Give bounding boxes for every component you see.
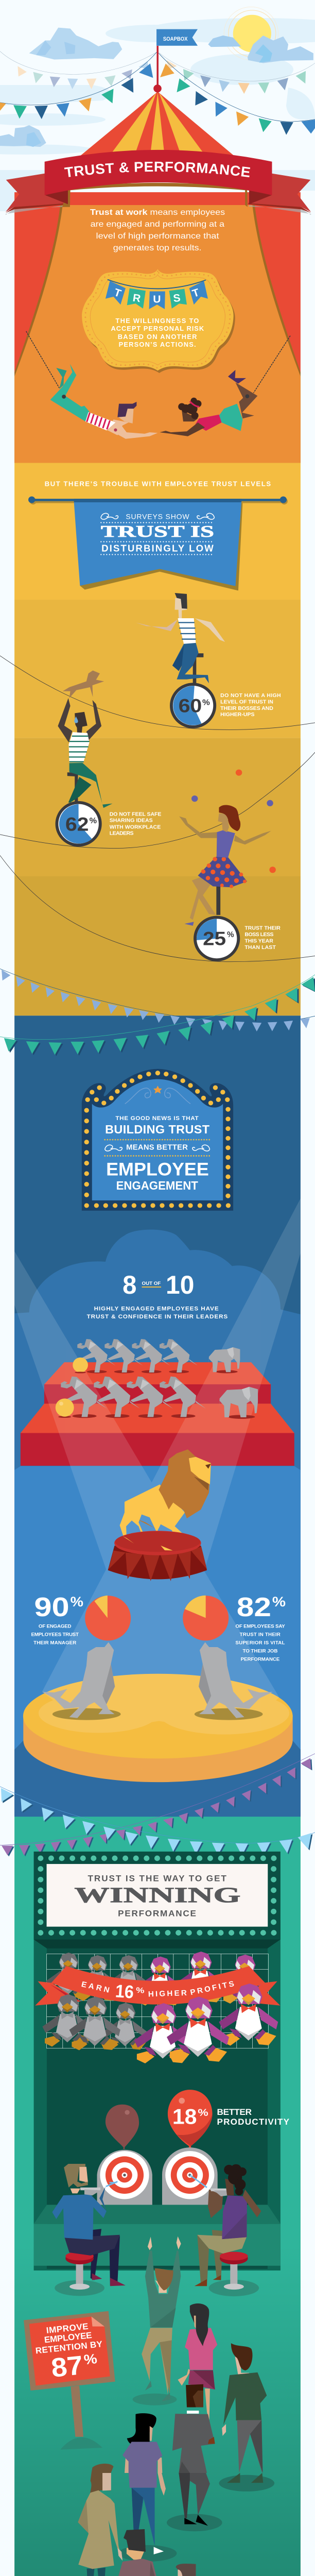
man in green jacket [222, 2343, 267, 2473]
text: 25 percent: THIS YEAR [244, 939, 273, 944]
woman in trench coat [78, 2473, 122, 2576]
retention sign: EMPLOYEE [44, 2330, 92, 2345]
unicycle wheel: 25 percent: % [227, 930, 234, 939]
trapeze artist woman [160, 370, 257, 436]
booth counter [34, 2205, 281, 2266]
player: right [190, 2164, 261, 2296]
scene in zoom coordinates [0, 7, 315, 463]
text: 62 percent: WITH WORKPLACE [110, 824, 161, 830]
TRUST pennants: U [153, 294, 161, 305]
prize banner [35, 1966, 280, 2006]
retention sign: 87 [50, 2350, 84, 2383]
prize banner: EARN [80, 1980, 110, 1995]
blue bunting [0, 969, 315, 1031]
retention sign: % [83, 2351, 98, 2367]
intro text [90, 208, 225, 252]
subheading: trouble: BUT THERE’S TROUBLE WITH EMPLOYEE TRUST LEVELS [45, 480, 271, 488]
trust definition text [111, 317, 204, 348]
heading: 8 out of 10: 10 [166, 1270, 194, 1299]
stat: 82 percent: TRUST IN THEIR [240, 1632, 281, 1638]
stat: 90 percent [31, 1592, 83, 1646]
text: better productivity: BETTER [217, 2107, 252, 2117]
marquee sign: good news: EMPLOYEE [106, 1159, 209, 1179]
lower darker floor [14, 1741, 301, 1817]
red curtain panel [14, 192, 301, 374]
balloon: dim [106, 2105, 139, 2149]
green bunting [0, 975, 315, 1056]
unicycle wheel: 25 percent: 25 [203, 928, 226, 950]
stat: 82 percent: % [272, 1594, 286, 1609]
text: 25 percent [244, 926, 281, 951]
front bunting [0, 52, 315, 135]
sky: pale cloud bands [0, 18, 315, 211]
unicyclist: juggler [179, 769, 276, 926]
unicyclist: 62 percent with dog [57, 670, 113, 845]
stat: 82 percent: 82 [237, 1592, 271, 1622]
unicyclist: 60 percent: % [202, 698, 210, 707]
game booth back [34, 1920, 281, 2270]
gray penguins back [46, 1953, 150, 2001]
red steps [21, 1362, 294, 1466]
booth marquee [34, 1852, 281, 1940]
seal: right with ball [183, 1596, 273, 1720]
retention sign [24, 2311, 115, 2450]
balloon: 18 percent [168, 2090, 213, 2148]
trust plaque [82, 269, 235, 373]
text: 62 percent: LEADERS [110, 831, 134, 836]
TRUST pennants: T [113, 286, 122, 300]
text: 60 percent [220, 693, 281, 718]
seal: left with ball [42, 1596, 131, 1720]
orange stage backdrop [14, 205, 301, 463]
floor shadows [68, 2475, 276, 2576]
marquee sign: good news: THE GOOD NEWS IS THAT [115, 1115, 199, 1122]
cheering person [133, 2236, 181, 2405]
intro text: are engaged and performing at a [91, 219, 225, 229]
TRUST pennants: S [172, 292, 181, 304]
man in gray suit [172, 2384, 215, 2473]
unicyclist: 62 percent with dog: % [90, 817, 97, 825]
woman in pink [178, 2303, 217, 2420]
booth marquee: WINNING [74, 1884, 241, 1907]
man in mauve shirt [105, 2529, 169, 2576]
heading: 8 out of 10 [122, 1270, 194, 1299]
TRUST pennants: T [191, 286, 201, 300]
text: highly engaged employees: TRUST & CONFIDENCE IN THEIR LEADERS [87, 1314, 227, 1320]
sky blue bunting [0, 1787, 315, 1857]
text: 25 percent: THAN LAST [244, 945, 276, 951]
hanging banner: TRUST IS [101, 522, 214, 540]
woman in purple shirt [122, 2413, 162, 2473]
text: 60 percent: LEVEL OF TRUST IN [220, 699, 273, 705]
gray penguins front [42, 1994, 147, 2050]
legs of the men [179, 2473, 263, 2526]
heading: 8 out of 10: 8 [122, 1270, 136, 1299]
trapeze chains [26, 331, 290, 393]
TRUST pennants: R [132, 292, 142, 304]
trust definition text: BASED ON ANOTHER [118, 333, 197, 341]
booth marquee: PERFORMANCE [118, 1909, 196, 1918]
unicyclist: 62 percent with dog: 62 [65, 814, 89, 835]
unicyclist: 60 percent [135, 593, 225, 727]
stat: 90 percent: % [71, 1594, 83, 1609]
flag pole and flag [156, 29, 198, 87]
player: left [52, 2164, 126, 2296]
balloon: 18 percent: 18 [172, 2105, 197, 2128]
stat: 82 percent: PERFORMANCE [241, 1657, 280, 1662]
text: 60 percent: DO NOT HAVE A HIGH [220, 693, 281, 699]
circus tent top [80, 84, 234, 156]
circus drum [108, 1531, 207, 1581]
pale back bunting [0, 51, 315, 94]
text: 25 percent: TRUST THEIR [244, 926, 281, 931]
balloon: 18 percent: % [198, 2108, 208, 2119]
prize banner: PROFITS [189, 1979, 235, 1997]
stat: 90 percent: OF ENGAGED [39, 1624, 72, 1630]
elephants row [73, 1339, 240, 1374]
orange stage fill [14, 205, 301, 463]
booth marquee: TRUST IS THE WAY TO GET [88, 1874, 226, 1884]
green section background [14, 1817, 301, 2576]
hanging banner [28, 497, 288, 590]
yellow ring platform [23, 1674, 293, 1782]
marquee sign: good news: ENGAGEMENT [116, 1179, 198, 1192]
cloud: right of sun [208, 36, 313, 63]
stat: 90 percent: EMPLOYEES TRUST [31, 1632, 79, 1638]
target: left [97, 2150, 152, 2205]
text: highly engaged employees [87, 1306, 227, 1320]
intro text: Trust at work means employees [90, 208, 225, 217]
cloud: upper left [29, 28, 122, 60]
cloud: lower left [0, 125, 46, 147]
yellow section backgrounds [14, 463, 301, 1015]
stat: 90 percent: 90 [34, 1592, 69, 1622]
sun [224, 7, 278, 60]
trapeze artist man [50, 364, 157, 439]
marquee sign: good news: MEANS BETTER [126, 1144, 188, 1152]
stat: 82 percent [235, 1592, 286, 1662]
stage floor [14, 1466, 301, 1750]
intro text: level of high performance that [96, 231, 219, 241]
prize banner: 16 [115, 1981, 134, 2003]
stat: 82 percent: SUPERIOR IS VITAL [235, 1640, 285, 1646]
tightropes [0, 656, 315, 962]
prize banner: % [136, 1986, 145, 1995]
curly haired woman head [92, 2464, 114, 2473]
stat: 82 percent: TO THEIR JOB [242, 1648, 277, 1654]
text: 25 percent: BOSS LESS [244, 932, 274, 938]
trust definition text: PERSON’S ACTIONS. [119, 341, 196, 348]
title ribbon [5, 149, 311, 215]
trust definition text: ACCEPT PERSONAL RISK [111, 325, 204, 332]
stat: 82 percent: OF EMPLOYEES SAY [235, 1624, 285, 1630]
prize banner: HIGHER [148, 1989, 187, 1998]
text: better productivity [217, 2107, 290, 2127]
text: 62 percent [110, 811, 161, 836]
heading: 8 out of 10: OUT OF [142, 1281, 161, 1286]
retention sign: RETENTION BY [35, 2339, 103, 2355]
purple penguins back [136, 1952, 268, 2006]
purple bunting [0, 1754, 315, 1856]
purple penguins front [134, 1984, 278, 2063]
father [155, 2564, 214, 2576]
text: highly engaged employees: HIGHLY ENGAGED EMPLOYEES HAVE [94, 1306, 219, 1312]
text: 60 percent: HIGHER-UPS [220, 712, 255, 718]
marquee sign: good news [82, 1069, 233, 1211]
intro text: generates top results. [113, 243, 201, 252]
text: 60 percent: THEIR BOSSES AND [220, 706, 273, 711]
trust definition text: THE WILLINGNESS TO [115, 317, 199, 325]
spotlight beams [14, 1198, 301, 1735]
unicyclist: 60 percent: 60 [179, 696, 202, 717]
hanging banner: SURVEYS SHOW [126, 513, 190, 520]
blue circus section background [14, 1015, 301, 1817]
target: right [162, 2147, 218, 2205]
spotlight halo cloud [14, 1230, 301, 1473]
lion [120, 1449, 211, 1552]
marquee sign: good news: BUILDING TRUST [105, 1123, 209, 1136]
stat: 90 percent: THEIR MANAGER [33, 1640, 76, 1646]
text: 62 percent: DO NOT FEEL SAFE [110, 811, 161, 817]
TRUST pennants [106, 280, 208, 309]
text: 62 percent: SHARING IDEAS [110, 818, 153, 824]
title ribbon: TRUST & PERFORMANCE [64, 162, 250, 177]
hanging banner: DISTURBINGLY LOW [101, 543, 214, 554]
elephants front row [56, 1377, 258, 1419]
retention sign: IMPROVE [46, 2321, 89, 2335]
prize grid [47, 1954, 268, 2048]
jeans and white shoe [129, 2473, 166, 2554]
unicycle wheel: 25 percent [195, 917, 238, 960]
flag pole and flag: SOAPBOX [163, 36, 188, 42]
text: better productivity: PRODUCTIVITY [217, 2117, 290, 2127]
